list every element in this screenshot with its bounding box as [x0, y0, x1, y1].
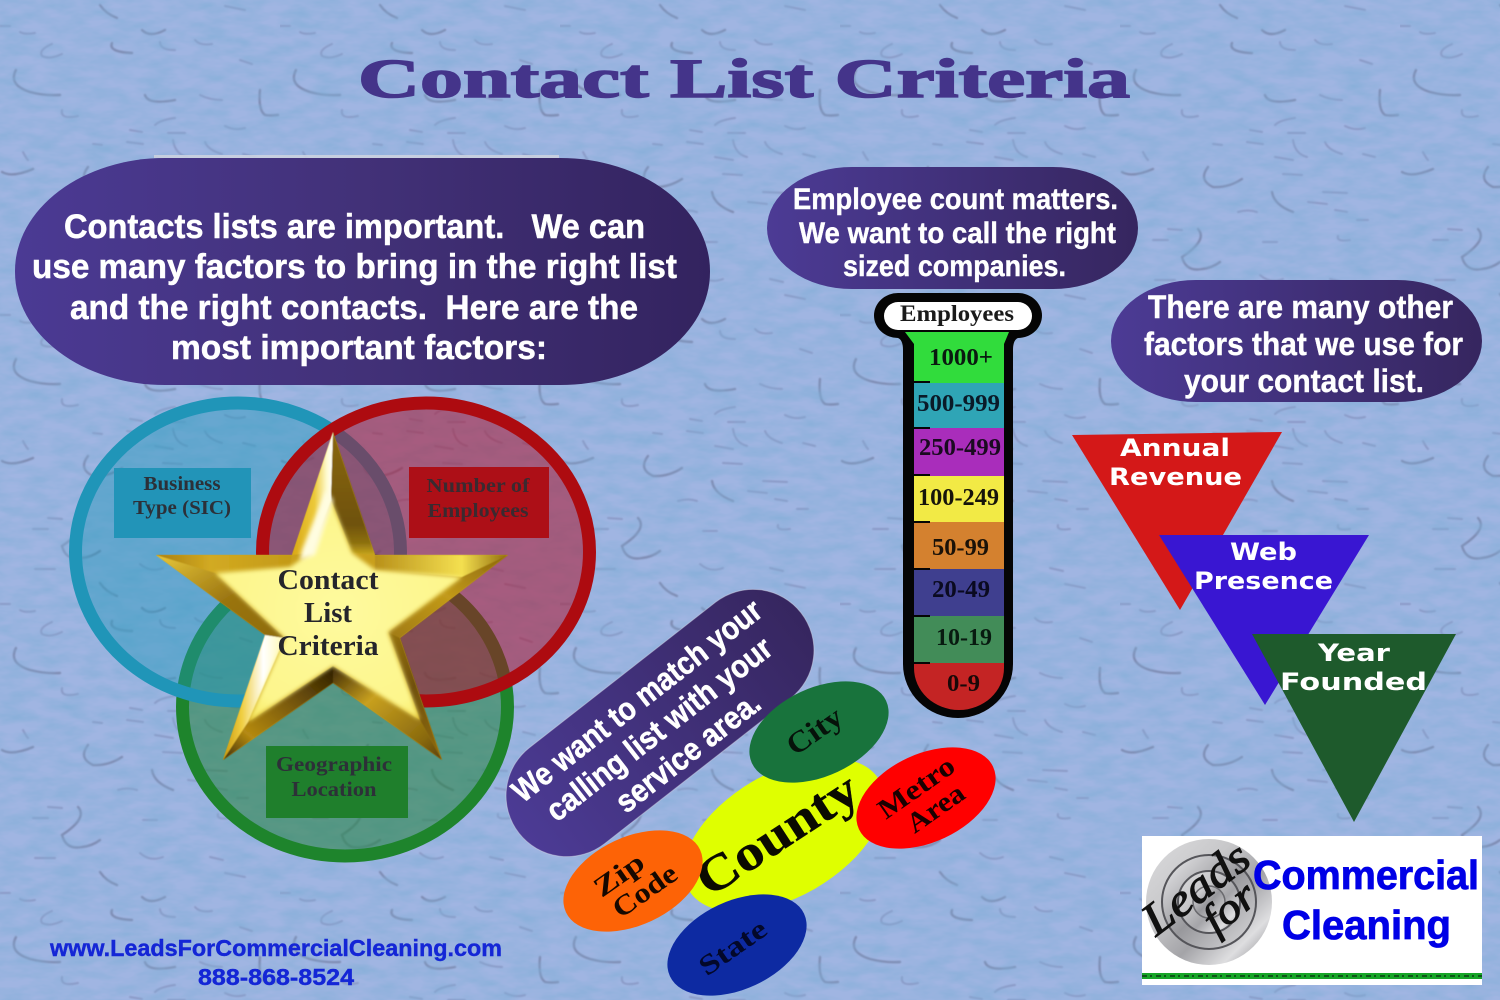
panel: other factors bubble: factors that we use for — [1144, 326, 1463, 362]
ellipse: city: City — [780, 700, 849, 762]
circle: business type — [76, 403, 400, 701]
panel: intro bubble: Contacts lists are important. We can — [64, 208, 645, 246]
logo green strip — [1142, 973, 1482, 979]
triangle: web presence: Web — [1230, 538, 1297, 566]
band: 100-249 — [914, 476, 1004, 522]
footer website: www.LeadsForCommercialCleaning.com — [49, 935, 502, 961]
band: 1000+ — [905, 332, 1009, 383]
label: business type — [114, 468, 251, 538]
ellipse: metro area — [840, 727, 1012, 869]
star highlight — [300, 490, 333, 560]
label: business type: Business — [144, 473, 221, 495]
triangle: annual revenue — [1072, 432, 1282, 610]
title: Contact List Criteria — [358, 48, 1130, 109]
band: 10-19: 10-19 — [936, 625, 992, 651]
band: 250-499 — [914, 428, 1004, 476]
triangle: web presence — [1159, 535, 1369, 705]
triangle: year founded: Founded — [1280, 668, 1427, 696]
band: 0-9 — [914, 663, 1004, 710]
circle: number of employees — [262, 403, 590, 701]
ellipse: state — [651, 874, 823, 1000]
panel: intro bubble: and the right contacts. Here are the — [70, 289, 638, 327]
band: 0-9: 0-9 — [947, 671, 980, 697]
ellipse: state: State — [693, 914, 773, 983]
ellipse: county — [658, 726, 910, 944]
panel: other factors bubble — [1111, 280, 1482, 402]
panel: service area bubble — [481, 565, 839, 881]
venn diagram — [76, 403, 590, 856]
footer phone: 888-868-8524 — [198, 964, 354, 990]
logo script: Leads: Leads — [1130, 831, 1259, 946]
logo text: Cleaning: Cleaning — [1282, 902, 1451, 948]
panel: employee count bubble: Employee count matters. — [793, 183, 1118, 216]
triangle: year founded — [1252, 634, 1456, 822]
star label: Criteria — [278, 630, 379, 662]
circle: geographic location — [182, 558, 508, 856]
ellipse: zip code: Zip — [588, 847, 651, 904]
label: number of employees: Number of — [426, 475, 530, 497]
band: 100-249: 100-249 — [918, 485, 999, 511]
label: geographic location — [266, 746, 408, 818]
test tube: employees — [874, 293, 1042, 718]
band: 50-99 — [914, 522, 1004, 569]
ellipse: city — [733, 661, 905, 803]
star label: Contact — [278, 564, 379, 596]
panel: intro bubble — [15, 155, 710, 385]
band: 500-999: 500-999 — [917, 391, 1000, 417]
panel: intro bubble: most important factors: — [171, 329, 547, 367]
tube cap label — [884, 301, 1032, 330]
label: number of employees — [409, 467, 549, 538]
label: geographic location: Geographic — [276, 752, 392, 776]
panel: employee count bubble: sized companies. — [843, 250, 1066, 283]
band: 50-99: 50-99 — [932, 535, 989, 561]
tube outline — [874, 293, 1042, 718]
ellipse: zip code: Code — [607, 858, 684, 925]
logo: leads for commercial cleaning — [1130, 831, 1482, 985]
band: 250-499: 250-499 — [919, 435, 1001, 461]
triangle: annual revenue: Revenue — [1109, 463, 1242, 491]
band: 20-49 — [914, 569, 1004, 616]
triangle: year founded: Year — [1317, 639, 1390, 667]
band: 20-49: 20-49 — [932, 577, 990, 603]
panel: employee count bubble — [767, 167, 1138, 289]
band: 10-19 — [914, 616, 1004, 663]
triangle: annual revenue: Annual — [1120, 434, 1230, 462]
ellipse: metro area: Area — [901, 778, 971, 840]
panel: intro bubble: use many factors to bring in the right list — [32, 248, 677, 286]
ellipse: zip code — [547, 810, 719, 952]
ellipse: county: County — [685, 760, 869, 907]
panel: employee count bubble: We want to call the right — [799, 217, 1116, 250]
logo script: for: for — [1193, 872, 1266, 944]
panel: other factors bubble: your contact list. — [1184, 363, 1424, 399]
ellipse: metro area: Metro — [872, 750, 961, 826]
panel: service area bubble: We want to match your — [505, 592, 769, 809]
icon: gold star — [156, 432, 508, 760]
panel: service area bubble: service area. — [608, 684, 767, 820]
tube cap label: Employees — [900, 301, 1014, 326]
panel: service area bubble: calling list with your — [539, 629, 779, 828]
panel: other factors bubble: There are many other — [1148, 289, 1453, 325]
geography ellipses — [547, 661, 1012, 1000]
label: number of employees: Employees — [428, 500, 529, 522]
band: 1000+: 1000+ — [929, 345, 993, 371]
icon: metal disc — [1146, 839, 1272, 965]
label: geographic location: Location — [292, 777, 377, 801]
triangle: web presence: Presence — [1194, 567, 1333, 595]
band: 500-999 — [914, 383, 1004, 428]
label: business type: Type (SIC) — [133, 497, 231, 519]
star label: List — [304, 597, 352, 629]
logo text: Commercial: Commercial — [1253, 852, 1479, 898]
